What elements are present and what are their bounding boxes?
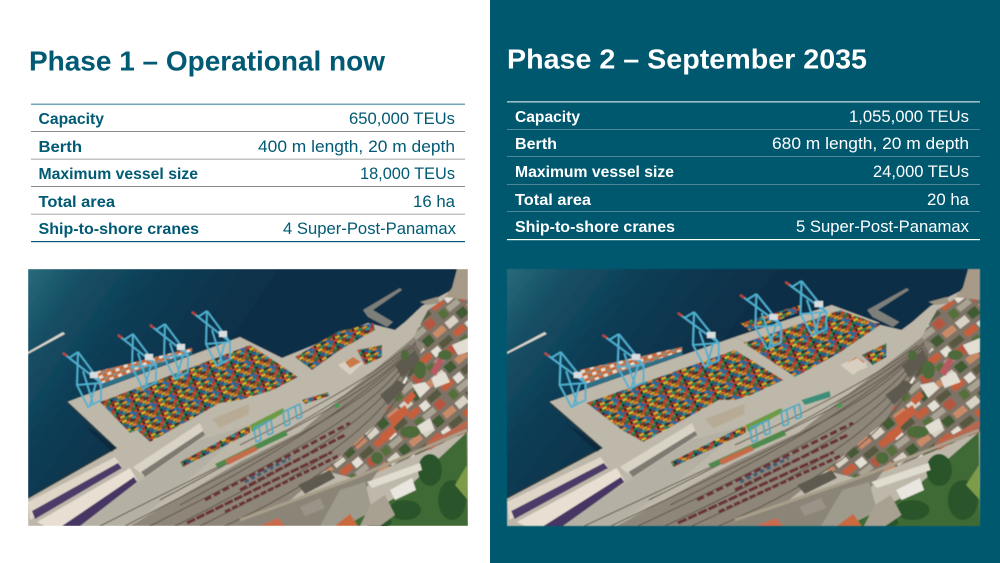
image: aerial view of port, phase 2 — [507, 269, 980, 528]
heading: phase 2: Phase 2 – September 2035 — [507, 44, 867, 74]
table: phase 1 specifications: 650,000 TEUs — [349, 110, 455, 128]
table: phase 1 specifications: Maximum vessel size — [38, 166, 198, 183]
table: phase 2 specifications: Ship-to-shore cranes — [515, 219, 675, 236]
table: phase 1 specifications: Ship-to-shore cranes — [38, 221, 199, 238]
table: phase 1 specifications: Berth — [38, 139, 82, 156]
table: phase 2 specifications: 680 m length, 20 m depth — [772, 135, 969, 153]
table: phase 1 specifications: 4 Super-Post-Panamax — [283, 220, 457, 238]
table: phase 2 specifications: Capacity — [515, 109, 580, 126]
table: phase 1 specifications: 400 m length, 20 m depth — [258, 138, 455, 156]
image: aerial view of port, phase 1 — [28, 269, 468, 528]
panel: phase 1 — [28, 50, 468, 526]
table: phase 1 specifications: 16 ha — [413, 193, 456, 211]
table: phase 2 specifications: 5 Super-Post-Panamax — [796, 218, 970, 236]
heading: phase 1: Phase 1 – Operational now — [29, 46, 385, 76]
table: phase 1 specifications: 18,000 TEUs — [360, 165, 455, 183]
table: phase 1 specifications — [31, 104, 465, 242]
table: phase 1 specifications: Capacity — [38, 111, 104, 128]
table: phase 1 specifications: Total area — [38, 194, 115, 211]
table: phase 2 specifications — [507, 101, 980, 240]
table: phase 2 specifications: Berth — [515, 136, 557, 153]
table: phase 2 specifications: Maximum vessel size — [515, 164, 674, 181]
table: phase 2 specifications: 24,000 TEUs — [873, 163, 969, 181]
table: phase 2 specifications: 1,055,000 TEUs — [849, 108, 969, 126]
panel: phase 2 — [490, 0, 1000, 563]
table: phase 2 specifications: 20 ha — [927, 191, 970, 209]
table: phase 2 specifications: Total area — [515, 192, 591, 209]
